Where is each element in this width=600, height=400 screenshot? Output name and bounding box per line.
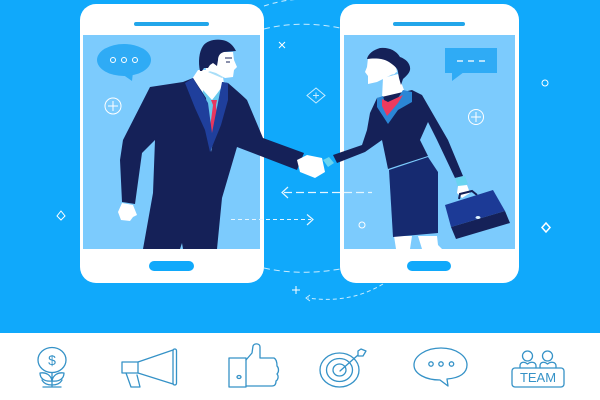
icon: thumbs up bbox=[229, 344, 278, 387]
woman wrist cuff bbox=[455, 176, 468, 187]
right phone bbox=[340, 4, 519, 283]
woman handshake cuff bbox=[323, 157, 334, 167]
woman blouse bbox=[382, 95, 403, 116]
briefcase bbox=[445, 190, 510, 239]
woman skirt bbox=[389, 157, 438, 237]
man face bbox=[204, 52, 237, 78]
man left hand bbox=[118, 203, 137, 221]
icon: team: TEAM bbox=[520, 370, 556, 385]
woman hand bbox=[457, 185, 470, 198]
handshake hands bbox=[297, 155, 325, 178]
man suit bbox=[120, 78, 304, 249]
connecting dashed lines and floating decorations bbox=[57, 0, 550, 301]
icon: money plant bbox=[38, 348, 66, 387]
white icon strip bbox=[0, 333, 600, 400]
woman face bbox=[365, 54, 397, 84]
man neck and collar bbox=[192, 70, 224, 102]
woman ear bbox=[390, 70, 396, 74]
icon: chat bubble bbox=[414, 348, 467, 386]
left phone bbox=[80, 4, 264, 283]
woman lapels bbox=[377, 90, 412, 124]
plus icons on screens bbox=[105, 98, 484, 228]
icon: money plant: $ bbox=[48, 352, 56, 368]
icon row bbox=[38, 344, 564, 387]
speech bubble: square with dashes bbox=[445, 48, 497, 81]
man hair bbox=[199, 40, 236, 71]
man lapels bbox=[185, 78, 228, 152]
businessman bbox=[118, 40, 304, 249]
icon: target bbox=[320, 349, 366, 387]
icon: megaphone bbox=[122, 349, 176, 387]
woman jacket bbox=[333, 90, 463, 178]
man shirt and tie bbox=[203, 85, 226, 150]
woman legs bbox=[394, 236, 442, 249]
dashed arrows bbox=[231, 187, 372, 225]
woman neck and chest bbox=[382, 74, 404, 108]
woman hair bbox=[367, 48, 410, 85]
businesswoman bbox=[323, 48, 470, 249]
speech bubble: round with dots bbox=[97, 44, 151, 81]
icon: team bbox=[512, 351, 564, 387]
